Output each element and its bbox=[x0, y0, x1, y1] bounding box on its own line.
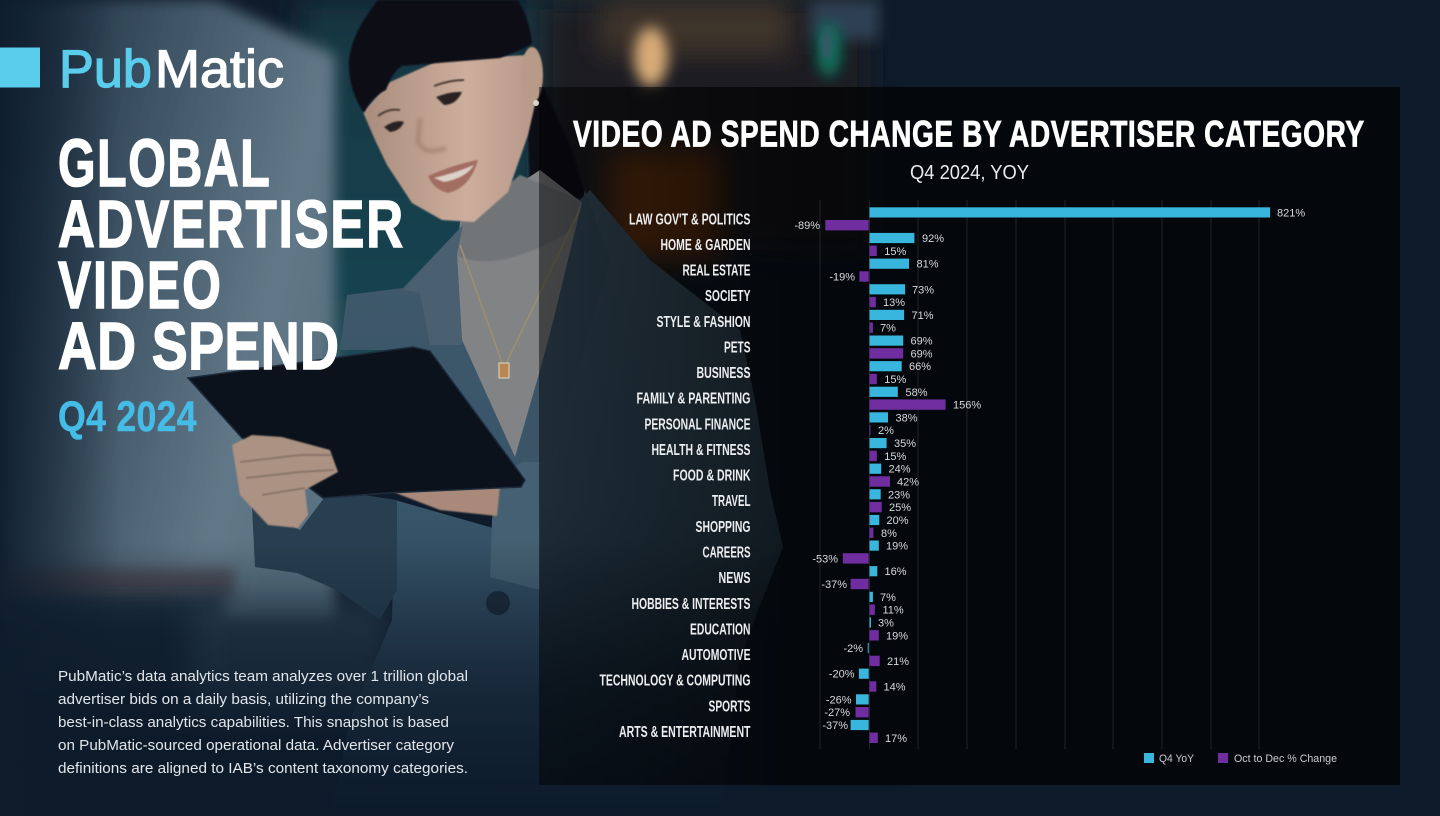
bottom fade bbox=[0, 540, 1440, 816]
logo bbox=[0, 40, 284, 99]
Oct to Dec value labels: 15% bbox=[884, 246, 907, 258]
main heading bbox=[58, 126, 403, 383]
main heading: GLOBAL bbox=[58, 126, 270, 201]
Oct to Dec value labels: 69% bbox=[910, 348, 933, 360]
category labels: FOOD & DRINK bbox=[673, 468, 751, 485]
necklace pendant bbox=[499, 363, 509, 378]
main heading: AD SPEND bbox=[58, 308, 339, 383]
Oct to Dec value labels: 156% bbox=[953, 400, 981, 412]
subheading: Q4 2024: Q4 2024 bbox=[58, 393, 197, 441]
jacket lapels bbox=[403, 225, 463, 345]
brown ledge bbox=[0, 568, 235, 600]
Q4 YoY value labels: 58% bbox=[906, 387, 928, 399]
Q4 YoY value labels: 66% bbox=[909, 361, 931, 373]
cuff right bbox=[490, 462, 540, 590]
Q4 YoY value labels: 38% bbox=[896, 412, 918, 424]
legend bbox=[1144, 753, 1337, 765]
Oct to Dec value labels: -27% bbox=[824, 707, 850, 719]
Oct to Dec value labels: -19% bbox=[829, 272, 855, 284]
Q4 YoY value labels: 821% bbox=[1277, 207, 1305, 219]
main heading: VIDEO bbox=[58, 249, 221, 323]
hand left bbox=[232, 435, 338, 528]
logo word Pub: Pub bbox=[59, 40, 152, 99]
Q4 YoY value labels: -2% bbox=[843, 643, 863, 655]
Oct to Dec value labels: 15% bbox=[884, 451, 907, 463]
description text: PubMatic’s data analytics team analyzes over 1 trillion global bbox=[58, 669, 468, 685]
Q4 YoY value labels: 73% bbox=[912, 284, 934, 296]
description text: on PubMatic-sourced operational data. Advertiser category bbox=[58, 738, 455, 754]
description text bbox=[58, 669, 468, 777]
right background bbox=[870, 0, 1440, 816]
Q4 YoY value labels: 24% bbox=[888, 464, 911, 476]
category labels: HOME & GARDEN bbox=[660, 237, 750, 254]
bar chart bbox=[600, 200, 1305, 749]
Oct to Dec value labels: 2% bbox=[878, 425, 894, 437]
description text: best-in-class analytics capabilities. This snapshot is based bbox=[58, 715, 449, 731]
Q4 YoY value labels: 20% bbox=[886, 515, 909, 527]
Oct to Dec value labels: 25% bbox=[889, 502, 911, 514]
logo square bbox=[0, 48, 40, 88]
Oct to Dec value labels: 17% bbox=[885, 733, 907, 745]
mouth bbox=[428, 160, 478, 193]
tablet bbox=[188, 347, 525, 498]
blurred wall bbox=[0, 0, 335, 620]
nose bbox=[418, 118, 446, 151]
legend key: Q4 YoY: Q4 YoY bbox=[1159, 753, 1195, 765]
category labels: ARTS & ENTERTAINMENT bbox=[619, 724, 751, 741]
Oct to Dec value labels: 7% bbox=[880, 323, 896, 335]
Oct to Dec change bars bbox=[825, 220, 946, 743]
Q4 YoY value labels: 69% bbox=[910, 336, 933, 348]
category labels: SOCIETY bbox=[705, 288, 751, 305]
category labels: EDUCATION bbox=[690, 621, 750, 638]
grid lines bbox=[820, 200, 1259, 749]
Oct to Dec value labels: 15% bbox=[884, 374, 907, 386]
Oct to Dec value labels: 14% bbox=[884, 682, 906, 694]
Q4 YoY value labels: -37% bbox=[822, 720, 848, 732]
face bbox=[363, 55, 536, 222]
Oct to Dec value labels: 42% bbox=[897, 476, 919, 488]
legend key: Q4 YoY bbox=[1144, 753, 1195, 765]
category labels: NEWS bbox=[718, 570, 750, 587]
teal backdrop bbox=[300, 0, 590, 430]
legend key: Oct to Dec % Change: Oct to Dec % Change bbox=[1234, 753, 1337, 765]
category labels: REAL ESTATE bbox=[682, 263, 750, 280]
Q4 YoY value labels: 92% bbox=[922, 233, 944, 245]
jacket body bbox=[330, 190, 783, 816]
Oct to Dec value labels: 19% bbox=[886, 630, 908, 642]
bokeh background bbox=[540, 0, 870, 250]
category labels: LAW GOV'T & POLITICS bbox=[629, 211, 750, 228]
category labels: PERSONAL FINANCE bbox=[644, 416, 750, 433]
category labels bbox=[600, 211, 751, 741]
Q4 YoY value labels: -26% bbox=[826, 694, 852, 706]
left fade bbox=[0, 0, 120, 816]
Oct to Dec value labels: -37% bbox=[821, 579, 847, 591]
Q4 YoY value labels: 23% bbox=[888, 489, 910, 501]
ear bbox=[521, 47, 543, 103]
Q4 YoY value labels: 71% bbox=[912, 310, 934, 322]
category labels: BUSINESS bbox=[696, 365, 750, 382]
Oct to Dec value labels: 8% bbox=[881, 528, 897, 540]
category labels: AUTOMOTIVE bbox=[682, 647, 750, 664]
jacket button bbox=[486, 591, 510, 615]
turtleneck and chest bbox=[457, 170, 585, 457]
panel: chart background bbox=[539, 87, 1400, 785]
hair bun bbox=[525, 60, 585, 215]
category labels: TECHNOLOGY & COMPUTING bbox=[600, 673, 750, 690]
category labels: PETS bbox=[724, 340, 750, 356]
Q4 YoY value labels bbox=[822, 207, 1305, 732]
description text: definitions are aligned to IAB’s content taxonomy categories. bbox=[58, 761, 468, 777]
description text: advertiser bids on a daily basis, utilizing the company’s bbox=[58, 692, 429, 708]
main heading: ADVERTISER bbox=[58, 186, 403, 262]
Oct to Dec value labels: 21% bbox=[887, 656, 909, 668]
Q4 YoY value labels: 3% bbox=[878, 618, 894, 630]
logo word Matic: Matic bbox=[155, 40, 284, 99]
Oct to Dec value labels: -89% bbox=[794, 220, 820, 232]
Q4 YoY value labels: 81% bbox=[916, 259, 939, 271]
Q4 YoY value labels: 35% bbox=[894, 438, 916, 450]
Oct to Dec value labels: 13% bbox=[883, 297, 905, 309]
chart title: VIDEO AD SPEND CHANGE BY ADVERTISER CATEGORY bbox=[573, 113, 1364, 154]
Oct to Dec value labels: 11% bbox=[882, 605, 904, 617]
chart subtitle: Q4 2024, YOY bbox=[910, 162, 1029, 184]
category labels: HOBBIES & INTERESTS bbox=[632, 596, 750, 613]
hand right bbox=[388, 486, 500, 516]
Q4 YoY value labels: 16% bbox=[884, 566, 907, 578]
Q4 YoY value labels: 7% bbox=[880, 592, 896, 604]
necklace bbox=[460, 205, 582, 368]
category labels: CAREERS bbox=[702, 544, 750, 562]
Q4 YoY value labels: 19% bbox=[886, 541, 908, 553]
Oct to Dec value labels: -53% bbox=[812, 553, 838, 565]
Q4 YoY value labels: -20% bbox=[829, 669, 855, 681]
category labels: FAMILY & PARENTING bbox=[636, 391, 750, 408]
Q4 YoY bars bbox=[851, 207, 1270, 730]
photo: woman with tablet bbox=[188, 0, 783, 816]
hair bbox=[349, 0, 532, 113]
Oct to Dec value labels bbox=[794, 220, 981, 745]
category labels: SPORTS bbox=[708, 698, 750, 715]
category labels: STYLE & FASHION bbox=[656, 314, 750, 331]
eyes and brows bbox=[384, 121, 404, 132]
category labels: HEALTH & FITNESS bbox=[652, 442, 750, 459]
sleeve left bbox=[252, 490, 397, 620]
category labels: TRAVEL bbox=[712, 493, 750, 510]
category labels: SHOPPING bbox=[696, 519, 750, 536]
